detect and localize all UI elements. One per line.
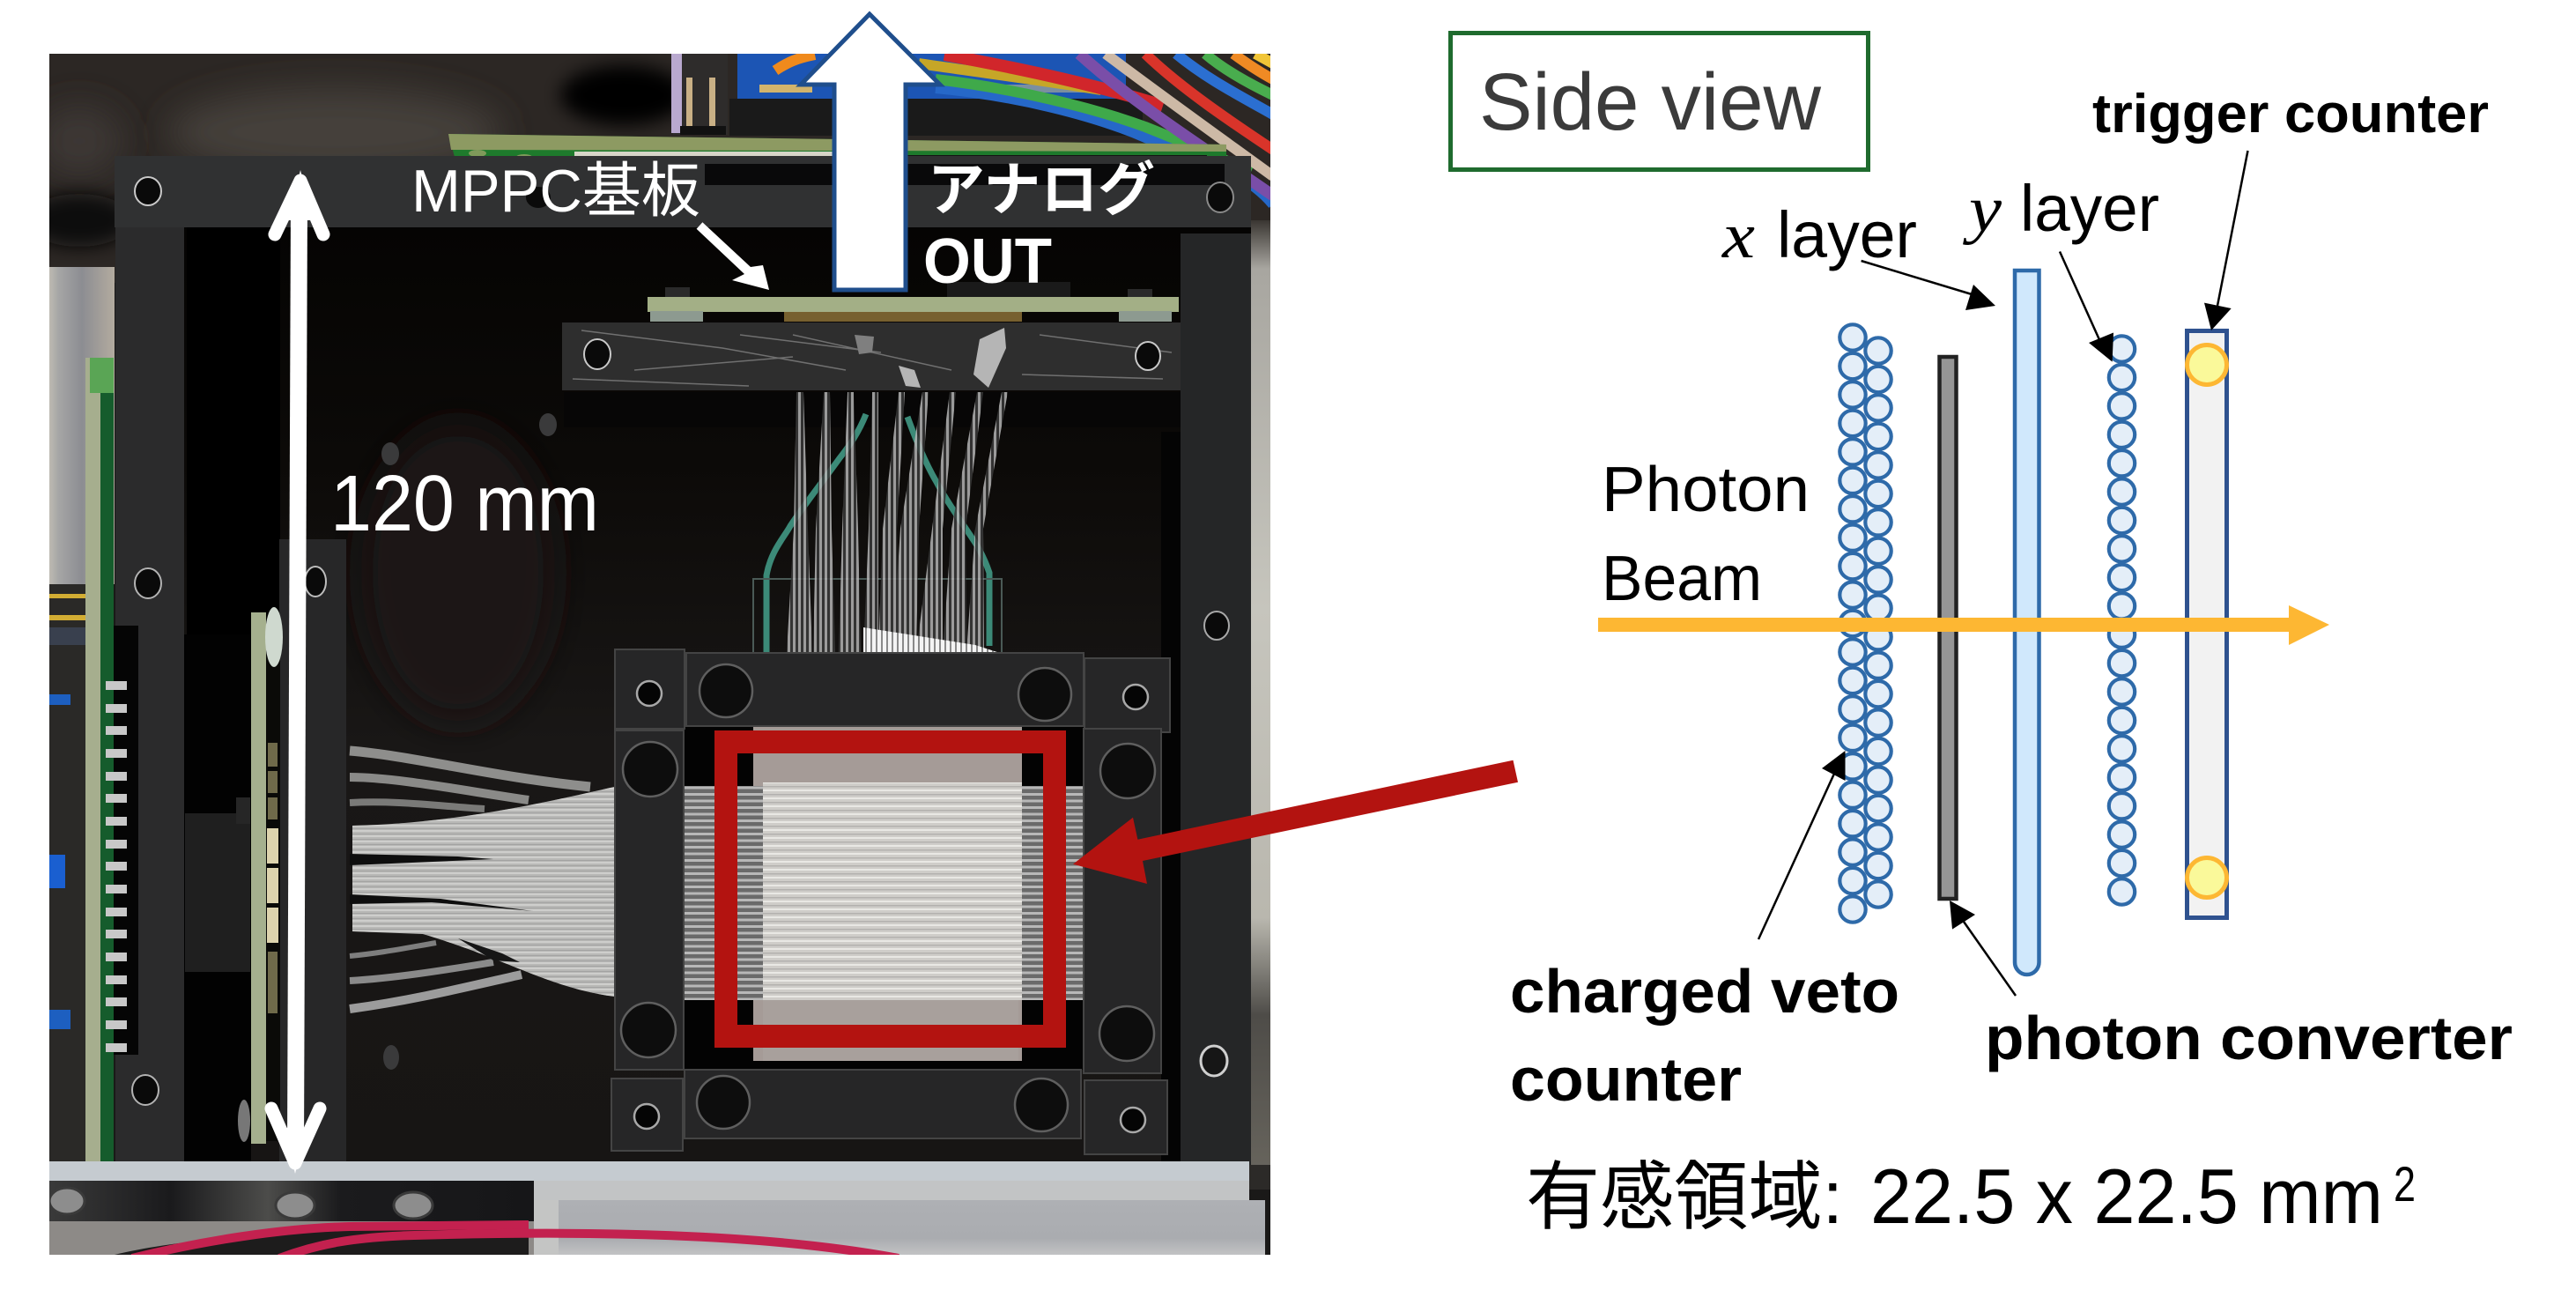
label: x layer: x (1721, 200, 1755, 272)
left fiber main fan (350, 787, 614, 997)
white double arrow: 120 mm (271, 170, 323, 1174)
label: y layer: layer (2020, 172, 2159, 245)
label: sensitive area: 22.5 x 22.5 mm (1870, 1153, 2383, 1240)
label: analog OUT: アナログ (928, 157, 1155, 222)
photon converter plate (1940, 357, 1956, 899)
mounting posts (381, 413, 557, 1070)
inner board and block (184, 539, 346, 1161)
side view title box (1450, 33, 1868, 169)
charged veto counter fibers: x layer (1839, 324, 1891, 923)
red highlight square (726, 742, 1055, 1036)
white fiber ends (863, 627, 997, 652)
red cables (132, 1225, 899, 1258)
frame top bar (115, 156, 1251, 227)
label: sensitive area (1526, 1153, 2416, 1240)
label: sensitive area: 2 (2394, 1156, 2416, 1212)
trigger counter (2187, 331, 2227, 918)
left board stack (49, 358, 114, 1172)
analog out arrow (801, 14, 940, 290)
left fiber thin bundles (350, 751, 590, 1009)
leader arrow: y layer (2060, 252, 2113, 362)
label: photon converter: photon converter (1985, 1004, 2513, 1072)
y layer fibers (2109, 336, 2135, 905)
red arrow to sensitive area (1073, 760, 1518, 884)
frame interior (184, 227, 1251, 622)
top PCB (448, 134, 1226, 156)
clamp screws (621, 664, 1155, 1131)
label: y layer (1962, 172, 2159, 246)
small arrow to MPPC board (697, 222, 769, 290)
label: analog OUT: OUT (923, 226, 1052, 297)
photo background left blur (49, 267, 115, 1163)
photo background right strip (1250, 220, 1270, 1190)
top connector (729, 54, 1143, 136)
leader arrow: charged veto counter (1758, 751, 1845, 939)
label: photon beam (1602, 455, 1810, 614)
photon beam arrow (1598, 605, 2329, 645)
label: charged veto counter (1510, 957, 1899, 1114)
scintillator sheet (684, 724, 1084, 1061)
label: analog OUT (923, 157, 1155, 297)
leader arrow: trigger counter (2204, 151, 2248, 330)
label: trigger counter: trigger counter (2092, 84, 2489, 145)
top fiber bundles (787, 392, 1008, 652)
top connector pins (671, 54, 728, 135)
label: charged veto counter: charged veto (1510, 957, 1899, 1026)
label: x layer: layer (1777, 198, 1917, 271)
leader arrow: x layer (1862, 261, 1995, 310)
leader arrow: photon converter (1950, 901, 2016, 996)
label: MPPC board: MPPC基板 (411, 158, 700, 225)
clamp blocks (611, 649, 1170, 1154)
label: photon beam: Photon (1602, 455, 1810, 525)
glass plate (753, 414, 1002, 653)
clamp window (684, 726, 1084, 1070)
header pins (106, 681, 127, 1052)
label: sensitive area: 有感領域: (1526, 1156, 1843, 1240)
label: charged veto counter: counter (1510, 1045, 1742, 1114)
photo: detector module (26, 54, 1273, 1258)
label: y layer: y (1962, 174, 2002, 246)
clamp holes (634, 681, 1148, 1132)
frame right pillar (1181, 234, 1251, 1172)
label: photon beam: Beam (1602, 544, 1762, 614)
frame left pillar (113, 227, 184, 1161)
y layer bar (2015, 271, 2039, 975)
label: 120 mm: 120 mm (330, 460, 599, 548)
side view title box: Side view (1479, 57, 1822, 147)
photo background top (26, 54, 1270, 283)
MPPC PCB (648, 282, 1179, 322)
fiber holder block (562, 322, 1181, 390)
aluminium base (49, 1161, 1270, 1255)
ribbon wires (775, 54, 1273, 204)
